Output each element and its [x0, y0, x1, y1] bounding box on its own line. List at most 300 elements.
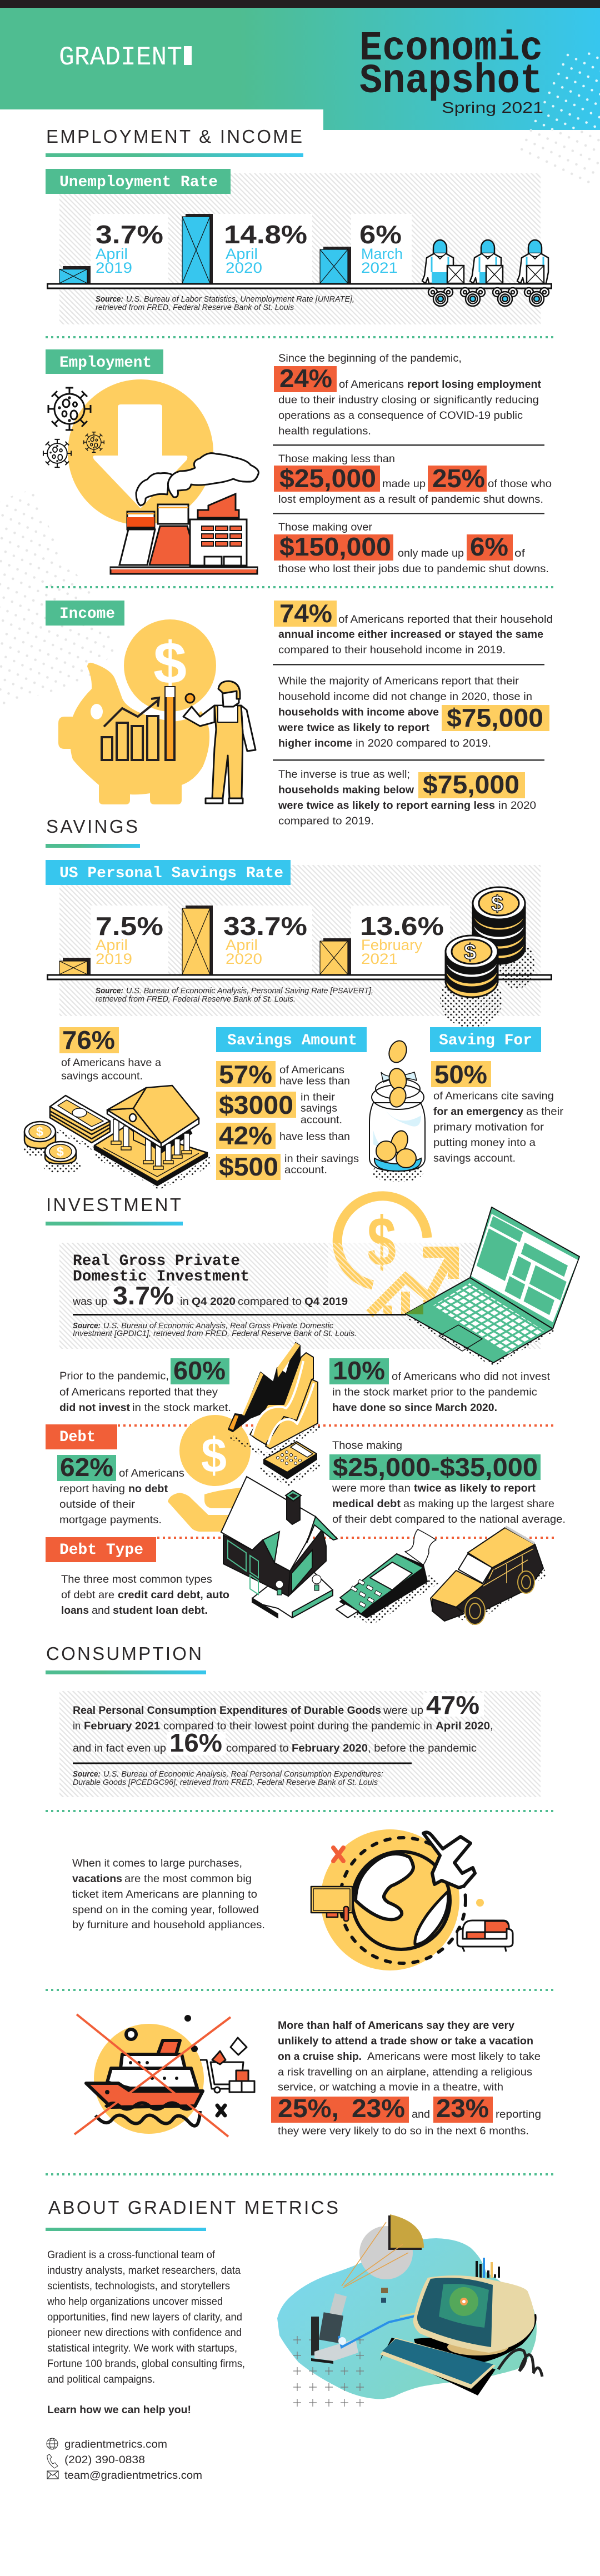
- text block: saving for: of Americans cite saving: [433, 1090, 554, 1102]
- illustration: house: [221, 1477, 337, 1618]
- cash stack: [50, 1096, 110, 1143]
- text block: savings amount: account.: [284, 1164, 327, 1176]
- roof: [221, 1477, 337, 1571]
- stat: 76% have a savings account: of Americans have a: [61, 1057, 161, 1069]
- icon: smoke clouds: [136, 453, 258, 506]
- icon: yellow dollar ring with growth arrow: [328, 1196, 461, 1315]
- title: Snapshot: [359, 58, 543, 105]
- title: investment panel: [73, 1253, 249, 1286]
- text block: cruise ship unlikely: More than half of Americans say they are very: [278, 2019, 514, 2032]
- line 2: ,: [490, 1720, 493, 1732]
- stat: 6% March 2021: 6%: [359, 220, 402, 249]
- stat: 76% have a savings account: 76%: [62, 1026, 115, 1054]
- highlight: 74%: 74%: [279, 599, 332, 628]
- stat line: up 3.7%: Q4 2019: [304, 1295, 348, 1308]
- text block: debt types: The three most common types: [61, 1573, 212, 1585]
- base plate and steps: [252, 1572, 333, 1618]
- highlight: $25,000: $25,000: [279, 464, 376, 493]
- decorative marks: [126, 2015, 225, 2115]
- text block: cruise ship unlikely: reporting: [496, 2108, 541, 2120]
- contact list: [47, 2438, 202, 2482]
- heading: savings: [46, 816, 140, 848]
- stat: 3.7% April 2019: April: [96, 246, 128, 262]
- text block: vacations: When it comes to large purchases,: [72, 1857, 242, 1869]
- text block: vacations: spend on in the coming year, followed: [72, 1904, 259, 1916]
- stat: 3.7% April 2019: 2019: [96, 259, 132, 276]
- stat: 6% March 2021: [359, 220, 403, 276]
- highlight: 25%, 23%: 23%: [352, 2094, 405, 2123]
- title: Economic: [359, 26, 543, 72]
- icon: coin stacks: $: [464, 940, 476, 964]
- chimney: [286, 1490, 301, 1524]
- stat: 6% March 2021: March: [361, 246, 403, 262]
- stat line: up 3.7%: Q4 2020: [192, 1295, 236, 1308]
- text block: debt types: student loan debt.: [113, 1604, 208, 1617]
- source note: retrieved from FRED, Federal Reserve Bank of St. Louis.: [96, 995, 296, 1004]
- text block: employment stats: of Americans: [339, 378, 404, 391]
- icon: phone: [47, 2454, 58, 2468]
- text block: employment stats: Those making less than: [278, 453, 395, 465]
- text block: saving for: [431, 1060, 564, 1164]
- source note: [96, 987, 373, 1004]
- stat: 33.7% April 2020: April: [226, 937, 258, 953]
- heading: savings: SAVINGS: [46, 816, 138, 837]
- highlight: $75,000 above: $75,000: [447, 703, 543, 732]
- moon and gold quarter: [342, 2214, 424, 2303]
- blob background: [277, 2238, 537, 2399]
- source note: U.S. Bureau of Economic Analysis, Personal Saving Rate [PSAVERT],: [126, 987, 373, 996]
- microscope: [311, 2293, 461, 2364]
- highlight: $500: $500: [219, 1152, 278, 1181]
- car body: [456, 1544, 543, 1617]
- text block: employment stats: health regulations.: [278, 425, 371, 437]
- contact list: team@gradientmetrics.com: [64, 2469, 202, 2482]
- stat: 13.6% February 2021: February: [361, 937, 423, 953]
- text block: 60% did not invest: Prior to the pandemic,: [59, 1370, 169, 1382]
- illustration: piggy bank with worker and chart: [58, 616, 256, 804]
- text block: saving for: savings account.: [433, 1152, 516, 1164]
- coin with dollar: $: [153, 629, 187, 696]
- line 2: [73, 1720, 493, 1732]
- heading: about Gradient Metrics: ABOUT GRADIENT METRICS: [48, 2197, 338, 2218]
- icon: three workers on conveyor: [422, 240, 549, 306]
- text block: $25,000-$35,000 medical debt: of their debt compared to the national average.: [332, 1513, 566, 1525]
- text block: cruise ship unlikely: Americans were most likely to take: [367, 2050, 541, 2063]
- text block: saving for: primary motivation for: [433, 1121, 544, 1133]
- text block: saving for: as their: [526, 1106, 564, 1118]
- source note: [96, 295, 354, 312]
- text block: employment stats: lost employment as a result of pandemic shut downs.: [278, 493, 543, 506]
- stat line: up 3.7%: compared to: [238, 1295, 302, 1308]
- text block: $25,000-$35,000 medical debt: were more than: [332, 1482, 411, 1494]
- text block: savings amount: savings: [301, 1102, 337, 1114]
- tag: debt type: Debt Type: [59, 1542, 143, 1559]
- text block: vacations: by furniture and household appliances.: [72, 1919, 265, 1931]
- illustration: globe, plane, TV and sofa: [311, 1829, 513, 1970]
- stat: 76% have a savings account: [59, 1026, 161, 1082]
- stat line: up 3.7%: 3.7%: [113, 1281, 174, 1310]
- text block: vacations: ticket item Americans are planning to: [72, 1888, 257, 1900]
- icon: coin stacks: [440, 887, 534, 1028]
- highlight: 6%: 6%: [470, 532, 508, 561]
- tag: debt: Debt: [59, 1429, 96, 1446]
- text block: 62% no debt: of Americans: [119, 1467, 184, 1479]
- icon: factory: [111, 494, 257, 574]
- calculator: [264, 1442, 317, 1479]
- terminal body: [336, 1554, 427, 1618]
- highlight: 25%, 23%: [271, 2094, 409, 2123]
- text block: income stats: households making below: [278, 784, 414, 796]
- squiggle: [498, 2349, 542, 2377]
- text block: savings amount: in their savings: [284, 1153, 359, 1165]
- illustration: crossed-out cruise ship and shopping cart: [74, 2014, 254, 2137]
- icon: envelope: [47, 2471, 58, 2479]
- highlight: $3000: $3000: [219, 1091, 293, 1119]
- bar: April 2020: [182, 906, 213, 974]
- text block: 60% did not invest: of Americans reported that they: [59, 1386, 218, 1398]
- icon: cruise ship: [86, 2040, 203, 2126]
- stat: 13.6% February 2021: 13.6%: [360, 912, 444, 941]
- illustration: coin jar: [369, 1038, 425, 1182]
- bar: March 2021: [320, 247, 351, 283]
- text block: income stats: compared to their household income in 2019.: [278, 644, 506, 656]
- text block: savings amount: have less than: [279, 1075, 350, 1087]
- retro monitor: [413, 2275, 537, 2367]
- coins: $: [57, 1144, 64, 1159]
- text block: debt types: loans: [61, 1604, 89, 1617]
- highlight: 57%: 57%: [219, 1060, 272, 1089]
- text block: vacations: are the most common big: [124, 1873, 252, 1885]
- text block: employment stats: only made up: [398, 547, 464, 559]
- text block: $25,000-$35,000 medical debt: Those making: [332, 1439, 402, 1452]
- heading: employment and income: EMPLOYMENT & INCOME: [46, 126, 302, 147]
- text block: debt types: and: [92, 1604, 110, 1617]
- text block: employment stats: report losing employment: [407, 378, 542, 391]
- illustration: car: [431, 1527, 547, 1625]
- text block: income stats: higher income: [278, 737, 352, 749]
- text block: $25,000-$35,000 medical debt: twice as likely to report: [414, 1482, 536, 1494]
- text block: about: Gradient is a cross-functional team of: [47, 2249, 216, 2261]
- bar: April 2019: [59, 958, 91, 974]
- receipt: [405, 1529, 436, 1565]
- conveyor belt: [48, 284, 551, 288]
- line 3 with 16%: and in fact even up: [73, 1742, 166, 1754]
- highlight: 25%, 23%: 25%,: [278, 2094, 339, 2123]
- plants: [276, 1575, 321, 1595]
- text block: 62% no debt: report having: [59, 1483, 125, 1495]
- line 1 with 47%: Real Personal Consumption Expenditures of Durable Goods: [73, 1704, 381, 1717]
- tag: employment: [46, 349, 163, 374]
- text block: 10% have invested: in the stock market prior to the pandemic: [332, 1386, 537, 1398]
- icon: red cross-out: [74, 2014, 231, 2137]
- source note: U.S. Bureau of Economic Analysis, Real Gross Private Domestic: [103, 1322, 334, 1330]
- text block: debt types: credit card debt, auto: [118, 1589, 229, 1601]
- icon: hand holding dollar coin: $: [201, 1428, 227, 1483]
- text block: 10% have invested: of Americans who did not invest: [392, 1370, 551, 1383]
- tag: US personal savings rate: [46, 860, 291, 885]
- title: [359, 26, 543, 116]
- text block: debt types: [61, 1573, 229, 1617]
- text block: income stats: were twice as likely to report: [278, 722, 430, 734]
- text block: about: Learn how we can help you!: [47, 2404, 191, 2416]
- illustration: card terminal: [336, 1529, 439, 1625]
- stat: 7.5% April 2019: [96, 912, 163, 967]
- text block: employment stats: due to their industry closing or significantly reducing: [278, 394, 539, 406]
- text block: 62% no debt: no debt: [128, 1483, 168, 1495]
- text block: vacations: vacations: [72, 1873, 122, 1885]
- line 3 with 16%: , before the pandemic: [368, 1742, 477, 1754]
- stat: 33.7% April 2020: [223, 912, 307, 967]
- text block: income stats: were twice as likely to report earning less: [278, 799, 495, 812]
- text block: saving for: putting money into a: [433, 1137, 536, 1149]
- panel: unemployment rate: [46, 169, 551, 324]
- text block: employment stats: Since the beginning of the pandemic,: [278, 352, 462, 364]
- icon: yellow dollar ring with growth arrow: $: [367, 1203, 396, 1281]
- text block: cruise ship unlikely: a risk travelling on an airplane, attending a religious: [278, 2066, 532, 2078]
- panel: real gross private domestic investment: [59, 1196, 541, 1349]
- heading: investment: INVESTMENT: [46, 1194, 181, 1215]
- text block: income stats: household income did not change in 2020, those in: [278, 691, 532, 703]
- text block: $25,000-$35,000 medical debt: as making up the largest share: [403, 1498, 554, 1510]
- crosses grid: [293, 2336, 364, 2407]
- source note: [73, 1322, 357, 1338]
- text block: income stats: annual income either increased or stayed the same: [278, 628, 543, 641]
- source note: Investment [GPDIC1], retrieved from FRED, Federal Reserve Bank of St. Louis.: [73, 1329, 357, 1338]
- text block: income stats: in 2020: [498, 799, 536, 812]
- text block: 62% no debt: outside of their: [59, 1498, 136, 1510]
- heading: about Gradient Metrics: [46, 2197, 338, 2231]
- text block: $25,000-$35,000 medical debt: medical debt: [332, 1498, 401, 1510]
- globe: [352, 1852, 450, 1949]
- text block: income stats: households with income above: [278, 706, 439, 718]
- stat line: up 3.7%: was up: [72, 1295, 107, 1308]
- stat: 3.7% April 2019: [96, 220, 163, 276]
- stat: 6% March 2021: 2021: [361, 259, 398, 276]
- highlight: 10%: 10%: [333, 1356, 385, 1385]
- text block: saving for: for an emergency: [433, 1106, 523, 1118]
- stat: 33.7% April 2020: 2020: [226, 951, 262, 967]
- source note: Source:: [73, 1322, 101, 1330]
- coin with dollar: [120, 616, 220, 716]
- text block: 60% did not invest: [59, 1356, 231, 1414]
- text block: about: [47, 2249, 245, 2416]
- icon: X marker: [333, 1848, 343, 1861]
- tag: unemployment rate: [46, 169, 231, 194]
- coins in the jar: [376, 1038, 416, 1168]
- icon: globe: [47, 2438, 58, 2449]
- highlight: 42%: 42%: [219, 1121, 272, 1150]
- folded chart: [228, 1343, 318, 1449]
- text block: savings amount: [216, 1060, 359, 1181]
- wheels: [465, 1571, 534, 1624]
- title: investment panel: Real Gross Private: [73, 1253, 240, 1270]
- stat: 7.5% April 2019: April: [96, 937, 128, 953]
- line 2: April 2020: [436, 1720, 490, 1732]
- icon: coin stacks: $: [491, 892, 503, 916]
- coins: [24, 1122, 76, 1164]
- line 2: February 2021: [84, 1720, 160, 1732]
- line 3 with 16%: February 2020: [292, 1742, 368, 1754]
- text block: income stats: in 2020 compared to 2019.: [356, 737, 491, 749]
- text block: income stats: compared to 2019.: [278, 815, 374, 827]
- text block: savings amount: of Americans: [279, 1064, 344, 1076]
- stat: 14.8% April 2020: April: [226, 246, 258, 262]
- stat: 14.8% April 2020: [224, 220, 307, 276]
- laptop keyboard base: [406, 1278, 553, 1363]
- text block: 62% no debt: mortgage payments.: [59, 1514, 162, 1526]
- text block: employment stats: operations as a consequence of COVID-19 public: [278, 409, 523, 422]
- text block: about: pioneer new directions with confidence and: [47, 2327, 242, 2339]
- text block: about: industry analysts, market researchers, data: [47, 2264, 241, 2277]
- stat: 3.7% April 2019: 3.7%: [96, 220, 163, 249]
- right wall: [288, 1529, 326, 1596]
- tag: unemployment rate: Unemployment Rate: [59, 174, 218, 191]
- tag: income: [46, 601, 124, 626]
- line 2: compared to their lowest point during the pandemic in: [163, 1720, 432, 1732]
- highlight: $150,000: $150,000: [279, 532, 391, 561]
- text block: about: who help organizations uncover missed: [47, 2295, 223, 2308]
- text block: savings amount: have less than: [279, 1131, 350, 1143]
- contact list: gradientmetrics.com: [64, 2438, 167, 2450]
- tag: savings amount: [216, 1027, 367, 1052]
- bar: April 2019: [59, 266, 91, 283]
- source note: Source:: [96, 987, 123, 996]
- text block: cruise ship unlikely: [271, 2019, 541, 2137]
- heading: employment and income: [46, 126, 303, 157]
- text block: cruise ship unlikely: service, or watching a movie in a theatre, with: [278, 2081, 503, 2093]
- source note: Source:: [73, 1770, 101, 1779]
- keyboard: [380, 2338, 496, 2395]
- line 1 with 47%: were up: [383, 1704, 423, 1717]
- conveyor belt: [48, 975, 551, 979]
- highlight: 60%: 60%: [173, 1356, 226, 1385]
- highlight: 24%: 24%: [279, 364, 332, 393]
- text block: 10% have invested: [329, 1356, 551, 1414]
- source note: U.S. Bureau of Economic Analysis, Real Personal Consumption Expenditures:: [103, 1770, 383, 1779]
- line 2: in: [73, 1720, 81, 1732]
- icon: worker: [183, 681, 256, 803]
- piggy bank: [58, 663, 209, 804]
- icon: television: [311, 1887, 352, 1921]
- text block: about: scientists, technologists, and storytellers: [47, 2280, 230, 2292]
- stat line: up 3.7%: [72, 1281, 348, 1310]
- stat: 14.8% April 2020: 2020: [226, 259, 262, 276]
- line 1 with 47%: [73, 1690, 479, 1719]
- text block: about: statistical integrity. We work with startups,: [47, 2342, 237, 2354]
- bar: April 2020: [182, 214, 213, 283]
- text block: about: and political campaigns.: [47, 2373, 155, 2385]
- stat line: up 3.7%: in: [180, 1295, 189, 1308]
- text block: cruise ship unlikely: unlikely to attend a trade show or take a vacation: [278, 2035, 533, 2047]
- laptop screen: [470, 1207, 579, 1329]
- bar: February 2021: [320, 938, 351, 974]
- text block: about: Fortune 100 brands, global consulting firms,: [47, 2358, 245, 2370]
- tag: US personal savings rate: US Personal Savings Rate: [59, 865, 283, 882]
- text block: employment stats: of those who: [488, 478, 552, 490]
- text block: about: opportunities, find new layers of clarity, and: [47, 2311, 242, 2323]
- source note: [73, 1770, 383, 1787]
- tag: savings amount: Savings Amount: [227, 1032, 357, 1049]
- text block: cruise ship unlikely: they were very likely to do so in the next 6 months.: [278, 2125, 529, 2137]
- text block: income stats: While the majority of Americans report that their: [278, 675, 519, 687]
- text block: income stats: [273, 599, 553, 827]
- text block: employment stats: [273, 352, 552, 575]
- illustration: down arrow, viruses, factory: [43, 379, 258, 574]
- text block: 62% no debt: [57, 1453, 184, 1526]
- text block: savings amount: account.: [301, 1114, 342, 1126]
- tag: employment: Employment: [59, 354, 152, 372]
- text block: employment stats: those who lost their jobs due to pandemic shut downs.: [278, 563, 549, 575]
- data bars: [476, 2258, 500, 2278]
- header band: [0, 0, 600, 183]
- text block: 10% have invested: have done so since March 2020.: [332, 1402, 497, 1414]
- stat: 33.7% April 2020: 33.7%: [223, 912, 307, 941]
- line 3 with 16%: 16%: [169, 1728, 222, 1757]
- source note: retrieved from FRED, Federal Reserve Bank of St. Louis: [96, 303, 294, 312]
- icon: viruses: [43, 388, 104, 467]
- icon: shopping cart and boxes: [200, 2038, 254, 2093]
- front wall: [223, 1535, 290, 1596]
- tag: debt: [46, 1424, 117, 1449]
- line 3 with 16%: [73, 1728, 477, 1757]
- text block: employment stats: Those making over: [278, 521, 373, 533]
- heading: consumption: [46, 1643, 206, 1674]
- text block: 60% did not invest: did not invest: [59, 1402, 131, 1414]
- text block: employment stats: made up: [382, 478, 426, 490]
- tag: income: Income: [59, 606, 115, 623]
- stat: 13.6% February 2021: 2021: [361, 951, 398, 967]
- stat: 7.5% April 2019: 2019: [96, 951, 132, 967]
- title: Spring 2021: [442, 99, 543, 116]
- tag: debt type: [46, 1537, 156, 1562]
- illustration: laptop with dashboards: [406, 1207, 579, 1367]
- highlight: $75,000 below: $75,000: [423, 770, 519, 799]
- text block: savings amount: in their: [301, 1091, 336, 1103]
- text block: 60% did not invest: in the stock market.: [132, 1402, 231, 1414]
- illustration: yellow folded charts and calculator: [228, 1343, 322, 1486]
- illustration: microscope, monitor and data collage: [277, 2214, 542, 2407]
- heading: consumption: CONSUMPTION: [46, 1643, 202, 1664]
- yellow circle with white down arrow: [68, 379, 213, 525]
- highlight: 23%: 23%: [436, 2094, 489, 2123]
- highlight: 25%: 25%: [432, 464, 485, 493]
- text block: income stats: The inverse is true as well;: [278, 768, 410, 781]
- panel: real personal consumption expenditures: [59, 1690, 541, 1797]
- source note: Durable Goods [PCEDGC96], retrieved from FRED, Federal Reserve Bank of St. Louis: [73, 1778, 378, 1787]
- stat: 13.6% February 2021: [360, 912, 444, 967]
- highlight: 62%: 62%: [60, 1453, 113, 1482]
- logo: Gradient: GRADIENT: [59, 43, 182, 73]
- text block: $25,000-$35,000 medical debt: [329, 1439, 566, 1525]
- source note: Source:: [96, 295, 123, 304]
- tag: saving for: Saving For: [439, 1032, 532, 1049]
- text block: vacations: [72, 1857, 265, 1931]
- stat: 76% have a savings account: savings account.: [61, 1070, 143, 1082]
- text block: income stats: of Americans reported that their household: [338, 613, 553, 626]
- heading: investment: [46, 1194, 183, 1226]
- text block: debt types: of debt are: [61, 1589, 114, 1601]
- illustration: bank, cash and coins: [22, 1086, 211, 1189]
- text block: employment stats: of: [514, 547, 526, 559]
- contact list: (202) 390-0838: [64, 2454, 145, 2466]
- line 3 with 16%: compared to: [226, 1742, 289, 1754]
- tag: saving for: [430, 1027, 541, 1052]
- text block: cruise ship unlikely: on a cruise ship.: [278, 2050, 362, 2063]
- text block: cruise ship unlikely: and: [412, 2108, 430, 2120]
- icon: hand holding dollar coin: [168, 1415, 281, 1532]
- icon: rising bar chart: [102, 687, 174, 760]
- panel: US personal savings rate: [46, 860, 551, 1028]
